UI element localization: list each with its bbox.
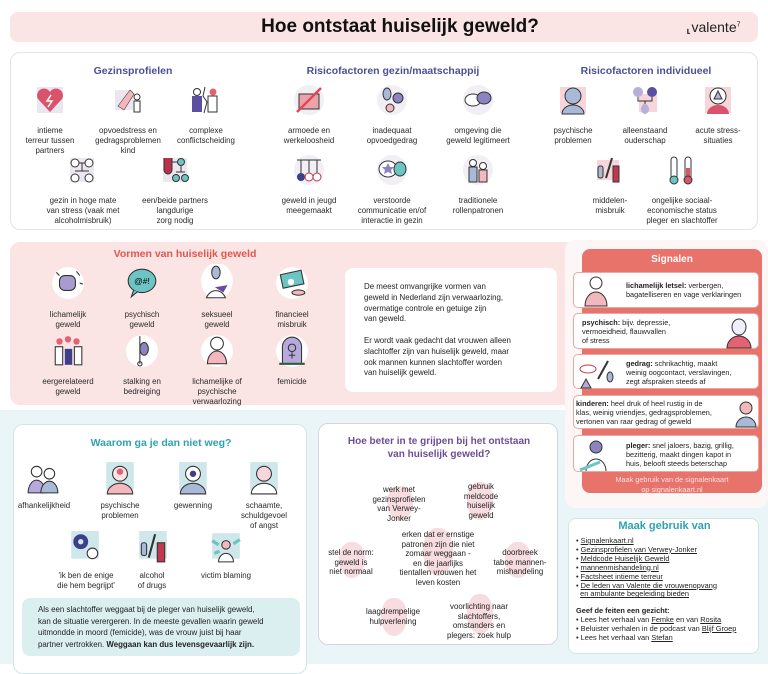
item: doorbreek taboe: doorbreek xyxy=(502,548,538,557)
item: stel de norm: niet normaal xyxy=(329,567,373,576)
text: zorg nodig xyxy=(157,216,193,225)
card: lichamelijk letsel: bagatelliseren en vage verklaringen xyxy=(626,290,741,299)
list: geef de feiten een gezicht: • Beluister verhalen in de podcast van Blijf Groep xyxy=(576,624,736,633)
labels risicofactoren gezin xyxy=(284,126,334,145)
text: rollenpatronen xyxy=(453,206,503,215)
card: psychisch xyxy=(573,313,759,349)
text: situaties xyxy=(704,136,732,145)
text: schuldgevoel xyxy=(241,511,287,520)
icon: verwaarlozing xyxy=(201,335,233,367)
card: gedrag xyxy=(573,354,759,389)
heading: Signalen: Signalen xyxy=(651,254,693,265)
heading: Risicofactoren individueel: Risicofactoren individueel xyxy=(581,65,711,77)
item: laagdrempelige hulpverlening: hulpverlening xyxy=(370,617,416,626)
icon: psychisch xyxy=(128,268,156,298)
text block: meest omvangrijke vormen: overmatige controle en getuige zijn xyxy=(364,304,486,313)
card: kinderen: kinderen: heel druk of heel rustig in de xyxy=(576,399,703,408)
labels risicofactoren individueel xyxy=(553,126,593,145)
text: psychisch xyxy=(125,310,159,319)
card: pleger xyxy=(573,435,759,472)
text: alcohol xyxy=(139,571,164,580)
item: gebruik meldcode: meldcode xyxy=(464,492,498,501)
icon: rollenpatronen xyxy=(463,155,493,185)
coral background xyxy=(582,249,762,493)
labels: vormen: lichamelijk xyxy=(50,310,86,319)
list: geef de feiten een gezicht: • Lees het verhaal van Femke en van Rosita xyxy=(576,615,721,624)
panel: signalen xyxy=(582,249,762,493)
labels risicofactoren individueel: psychische xyxy=(553,126,593,135)
title: Hoe ontstaat huiselijk geweld? xyxy=(261,16,539,37)
list: links: • Factsheet intieme terreur xyxy=(576,572,663,581)
panel: hoe beter in te grijpen xyxy=(318,423,558,645)
item: werk met gezinsprofielen: werk met xyxy=(383,485,415,494)
text: van stress (vaak met xyxy=(47,206,119,215)
item: stel de norm: stel de norm: xyxy=(328,548,374,557)
card: psychisch: vermoeidheid, flauwvallen xyxy=(582,327,666,336)
icon: psychische problemen xyxy=(106,462,134,494)
panel: vormen van huiselijk geweld xyxy=(10,242,758,405)
text block: meest omvangrijke vormen xyxy=(345,268,557,392)
item: laagdrempelige hulpverlening: laagdrempelige xyxy=(366,607,420,616)
text: verwaarlozing xyxy=(193,397,241,406)
item: erken patronen: tientallen vrouwen het xyxy=(400,568,476,577)
icon: financieel xyxy=(276,267,308,299)
text: complexe xyxy=(189,126,223,135)
icon: psychisch: @#! xyxy=(134,276,150,286)
text block: weggaan levensgevaarlijk xyxy=(22,598,300,656)
item: stel de norm xyxy=(321,548,381,577)
text: verstoorde xyxy=(373,196,411,205)
text: ongelijke sociaal- xyxy=(652,196,712,205)
text: financieel xyxy=(275,310,309,319)
text: seksueel xyxy=(201,310,233,319)
list: geef de feiten een gezicht: • Lees het verhaal van Stefan xyxy=(576,633,673,642)
list: geef de feiten een gezicht xyxy=(576,607,736,643)
item: stel de norm: geweld is xyxy=(335,558,367,567)
text block: meest omvangrijke vormen: slachtoffer zijn van huiselijk geweld, maar xyxy=(364,347,509,356)
text: alcoholmisbruik) xyxy=(54,216,112,225)
item: gebruik meldcode xyxy=(451,482,511,520)
text: inadequaat xyxy=(372,126,412,135)
logo: valente: ⸤valente7 xyxy=(686,19,741,35)
card: kinderen xyxy=(573,395,759,429)
item: voorlichting xyxy=(437,602,521,640)
card: pleger: bezitterig, maakt dingen kapot in xyxy=(626,450,731,459)
icon: stalking xyxy=(126,335,158,367)
text: langdurige xyxy=(157,206,193,215)
item: erken patronen: leven kosten xyxy=(416,578,460,587)
labels gezinsprofielen: partners xyxy=(36,146,64,155)
labels gezinsprofielen xyxy=(26,126,74,155)
list: links: • mannenmishandeling.nl xyxy=(576,563,659,572)
card: kinderen: vertonen van raar gedrag of geweld xyxy=(576,417,691,426)
text: eergerelateerd xyxy=(42,377,94,386)
list: links: • Meldcode Huiselijk Geweld xyxy=(576,554,669,563)
text block: meest omvangrijke vormen: Er wordt vaak gedacht dat vrouwen alleen xyxy=(364,336,511,345)
item: laagdrempelige hulpverlening xyxy=(355,607,431,626)
list: links: • Signalenkaart.nl xyxy=(576,536,634,545)
text block: meest omvangrijke vormen: van geweld. xyxy=(364,314,406,323)
card: pleger: pleger: snel jaloers, bazig, grillig, xyxy=(626,441,734,450)
text: opvoedgedrag xyxy=(367,136,417,145)
item: voorlichting: plegers: zoek hulp xyxy=(447,631,511,640)
item: gebruik meldcode: gebruik xyxy=(468,482,494,491)
icon: gezin stress xyxy=(70,158,94,182)
text: 'ik ben de enige xyxy=(58,571,114,580)
text: economische status xyxy=(647,206,717,215)
text: bedreiging xyxy=(124,387,160,396)
background: bottom light blue area xyxy=(0,410,768,664)
labels gezinsprofielen: terreur tussen xyxy=(26,136,74,145)
text: meegemaakt xyxy=(286,206,332,215)
text: misbruik xyxy=(595,206,625,215)
title bar xyxy=(10,12,758,42)
card: psychisch: psychisch: bijv. depressie, xyxy=(582,318,670,327)
text: geweld xyxy=(129,320,154,329)
text: een/beide partners xyxy=(142,196,208,205)
text: kind xyxy=(121,146,135,155)
icon: geweld in jeugd xyxy=(294,155,324,185)
list: links xyxy=(576,537,717,599)
icon: omgeving xyxy=(463,85,493,115)
labels risicofactoren individueel: problemen xyxy=(554,136,592,145)
icon: communicatie xyxy=(377,155,407,185)
card: gedrag: gedrag: schrikachtig, maakt xyxy=(626,359,717,368)
labels gezinsprofielen: intieme xyxy=(37,126,63,135)
item: voorlichting: omstanders en xyxy=(453,621,505,630)
card: kinderen: klas, weinig vriendjes, gedragsproblemen, xyxy=(576,408,712,417)
item: doorbreek taboe xyxy=(485,548,555,577)
item: doorbreek taboe: mishandeling xyxy=(497,567,543,576)
card: lichamelijk letsel: lichamelijk letsel: verbergen, xyxy=(626,281,723,290)
icon: lichamelijk xyxy=(52,267,84,299)
heading: waarom: Waarom ga je dan niet weg? xyxy=(91,437,231,449)
icon: schaamte xyxy=(250,462,278,494)
text: geweld legitimeert xyxy=(446,136,510,145)
heading: Gezinsprofielen: Gezinsprofielen xyxy=(94,65,172,77)
text: schaamte, xyxy=(246,501,282,510)
panel: risk factors xyxy=(10,52,758,230)
text: traditionele xyxy=(459,196,497,205)
text: interactie in gezin xyxy=(361,216,423,225)
text: communicatie en/of xyxy=(358,206,426,215)
text: femicide xyxy=(277,377,307,386)
text: stalking en xyxy=(123,377,161,386)
text: middelen- xyxy=(593,196,627,205)
icons: risicofactoren gezin xyxy=(294,85,493,185)
icons: vormen xyxy=(52,264,308,367)
panel: maak gebruik van xyxy=(568,518,759,654)
footer: signalenkaart: op signalenkaart.nl xyxy=(641,484,703,494)
icon: alcohol xyxy=(136,530,170,564)
text block: weggaan levensgevaarlijk: kan de situatie verergeren. In de meeste gevallen waarin geweld xyxy=(38,616,263,626)
text: die hem begrijpt' xyxy=(57,581,115,590)
text: alleenstaand xyxy=(623,126,667,135)
text: geweld xyxy=(204,320,230,329)
text: geweld xyxy=(55,387,80,396)
list: links: • Gezinsprofielen van Verwey-Jonker xyxy=(576,545,697,554)
labels risicofactoren gezin: armoede en xyxy=(288,126,330,135)
icon: armoede xyxy=(294,85,324,115)
icon: gears xyxy=(68,530,102,564)
heading: hoe beter: Hoe beter in te grijpen bij het ontstaan xyxy=(348,436,530,447)
text block: meest omvangrijke vormen: ook mannen kunnen slachtoffer worden xyxy=(364,358,502,367)
panel: waarom ga je dan niet weg xyxy=(13,424,307,674)
list: geef de feiten een gezicht: Geef de feiten een gezicht: xyxy=(576,606,670,615)
card: gedrag: weinig oogcontact, verslavingen, xyxy=(626,368,731,377)
icon: femicide xyxy=(276,335,308,367)
icon: acute stress xyxy=(705,87,731,114)
icon: afhankelijkheid xyxy=(28,466,58,494)
heading: maak gebruik van: Maak gebruik van xyxy=(618,520,711,532)
text: acute stress- xyxy=(695,126,741,135)
icons: risicofactoren individueel xyxy=(560,87,731,184)
panel: signalen container xyxy=(565,240,768,508)
text block: weggaan levensgevaarlijk: Als een slachtoffer weggaat bij de pleger van huiselijk geweld, xyxy=(38,605,255,614)
icon: conflictscheiding xyxy=(192,86,218,114)
text: ouderschap xyxy=(624,136,666,145)
item: erken patronen: erken dat er ernstige xyxy=(402,530,474,539)
text: psychische xyxy=(197,387,237,396)
heading: vormen: Vormen van huiselijk geweld xyxy=(114,248,256,260)
item: erken patronen: en die jaarlijks xyxy=(413,559,463,568)
text: of angst xyxy=(250,521,278,530)
text block: weggaan levensgevaarlijk: uitmondde in moord (femicide), was de vrouw juist bij haar xyxy=(38,628,242,637)
item: voorlichting: voorlichting naar xyxy=(450,602,508,611)
icon: alleenstaand xyxy=(633,87,657,114)
icon: ongelijke status xyxy=(670,156,692,184)
blobs xyxy=(387,486,413,520)
card: gedrag: zegt afspraken steeds af xyxy=(626,377,706,386)
text: problemen xyxy=(101,511,139,520)
item: werk met gezinsprofielen: gezinsprofielen xyxy=(372,495,426,504)
text: omgeving die xyxy=(455,126,501,135)
icons: waarom xyxy=(28,462,278,562)
icon: heart xyxy=(37,87,63,113)
icon: psychische problemen xyxy=(560,87,586,114)
icon: middelenmisbruik xyxy=(597,158,620,182)
footer: signalenkaart xyxy=(615,475,729,494)
text: gezin in hoge mate xyxy=(50,196,116,205)
icon: eergerelateerd xyxy=(54,336,82,366)
labels: vormen: geweld xyxy=(55,320,80,329)
text: gedragsproblemen xyxy=(95,136,161,145)
icon: victim blaming xyxy=(209,530,243,564)
item: erken patronen xyxy=(383,530,493,588)
text: geweld in jeugd xyxy=(282,196,336,205)
icon: opvoedstress xyxy=(115,90,140,112)
text: of drugs xyxy=(138,581,166,590)
heading: Risicofactoren gezin/maatschappij: Risicofactoren gezin/maatschappij xyxy=(307,65,479,77)
text: opvoedstress en xyxy=(99,126,157,135)
text: psychische xyxy=(100,501,140,510)
text block: meest omvangrijke vormen: van huiselijk geweld. xyxy=(364,368,436,377)
text block: weggaan levensgevaarlijk: partner vertrokken. Weggaan kan dus levensgevaarlijk zijn. xyxy=(38,640,254,648)
text: pleger en slachtoffer xyxy=(646,216,718,225)
item: doorbreek taboe: taboe mannen- xyxy=(493,558,547,567)
item: erken patronen: patronen zijn die niet xyxy=(402,540,474,549)
text: misbruik xyxy=(277,320,307,329)
text: victim blaming xyxy=(201,571,251,580)
card: pleger: huis, belooft steeds beterschap xyxy=(626,459,727,468)
icon: seksueel xyxy=(201,264,233,299)
text: lichamelijke of xyxy=(192,377,242,386)
icon: gewenning xyxy=(179,462,207,494)
heading: hoe beter xyxy=(319,435,559,461)
item: werk met gezinsprofielen: Jonker xyxy=(387,514,411,523)
card: psychisch: of stress xyxy=(582,336,610,345)
heading: hoe beter: van huiselijk geweld? xyxy=(388,449,490,460)
text block: meest omvangrijke vormen: De meest omvangrijke vormen van xyxy=(364,282,486,291)
item: erken patronen: zomaar weggaan - xyxy=(405,549,471,558)
list: links: en ambulante begeleiding bieden xyxy=(580,589,689,598)
item: werk met gezinsprofielen xyxy=(359,485,439,523)
labels: vormen xyxy=(50,310,86,329)
item: voorlichting: slachtoffers, xyxy=(458,612,500,621)
item: gebruik meldcode: huiselijk xyxy=(467,501,495,510)
icon: opvoedgedrag xyxy=(377,85,407,115)
list: links: • De leden van Valente die vrouwenopvang xyxy=(576,581,717,590)
icons row gezinsprofielen xyxy=(37,86,218,182)
footer: signalenkaart: Maak gebruik van de signalenkaart xyxy=(615,475,729,484)
card: lichamelijk letsel xyxy=(573,272,759,308)
item: gebruik meldcode: geweld xyxy=(468,511,494,520)
text: conflictscheiding xyxy=(177,136,235,145)
icon: zorg xyxy=(163,158,189,182)
text: gewenning xyxy=(174,501,212,510)
labels risicofactoren gezin: werkeloosheid xyxy=(284,136,334,145)
labels: waarom: afhankelijkheid xyxy=(18,501,70,510)
item: werk met gezinsprofielen: van Verwey- xyxy=(377,504,421,513)
text block: meest omvangrijke vormen: geweld in Nederland zijn verwaarlozing, xyxy=(364,293,503,302)
